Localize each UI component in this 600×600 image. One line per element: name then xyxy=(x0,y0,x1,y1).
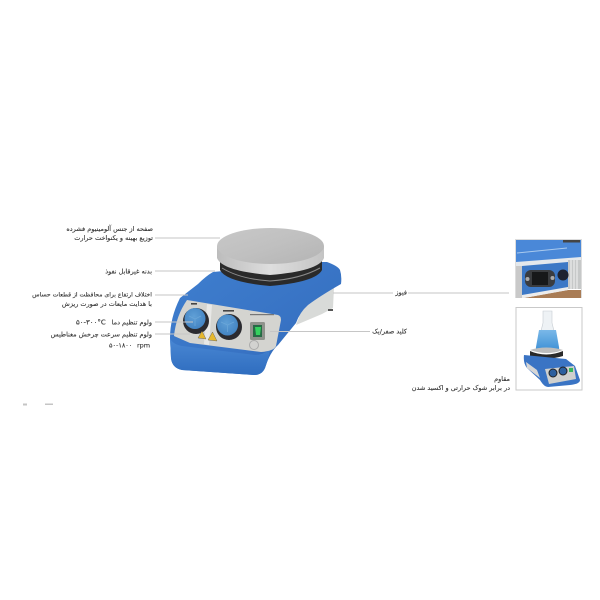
front lower lip xyxy=(170,338,270,375)
label: stirring speed knob: ولوم تنظیم سرعت چرخش مغناطیس xyxy=(51,330,152,338)
label: temperature knob: ولوم تنظیم دما xyxy=(112,318,152,326)
label: body: بدنه غیرقابل نفوذ xyxy=(105,268,152,276)
panel labels xyxy=(191,303,274,315)
photo: rear fuse and socket xyxy=(516,240,582,298)
right knob xyxy=(216,314,242,340)
leader lines xyxy=(155,238,509,334)
label: rpm range xyxy=(109,342,150,350)
main product: hotplate stirrer xyxy=(170,228,341,375)
label: resistance: در برابر شوک حرارتی و اکسید شدن xyxy=(412,384,510,392)
control panel xyxy=(174,300,281,352)
label: resistance xyxy=(412,375,510,392)
label: on/off switch: کلید صفر/یک xyxy=(372,328,408,336)
label: rpm range: ۵۰-۱۸۰۰ xyxy=(109,342,132,350)
green power switch xyxy=(250,322,265,340)
left knob xyxy=(183,308,209,334)
label: temperature knob: ۵۰-۳۰۰°C xyxy=(76,318,106,326)
photo: stirrer with flask xyxy=(516,308,582,390)
label: aluminium plate xyxy=(66,224,153,242)
label: height difference: اختلاف ارتفاع برای محافظت از قطعات حساس xyxy=(32,292,152,298)
label: fuse: فیوز xyxy=(394,288,407,296)
label: rpm range: rpm xyxy=(137,342,150,350)
blue body xyxy=(170,262,341,375)
label: aluminium plate: توزیع بهینه و یکنواخت حرارت xyxy=(74,234,153,242)
round badge xyxy=(250,340,258,350)
warning icons xyxy=(198,331,217,341)
grey rear housing xyxy=(296,283,341,325)
label: resistance: مقاوم xyxy=(494,375,510,383)
plate assembly xyxy=(217,228,324,286)
label: height difference: با هدایت مایعات در صورت ریزش xyxy=(62,300,152,308)
label: temperature knob xyxy=(76,318,152,326)
faint marks xyxy=(23,404,53,406)
label: aluminium plate: صفحه از جنس آلومینیوم فشرده xyxy=(66,224,153,233)
label: height difference xyxy=(32,292,152,308)
